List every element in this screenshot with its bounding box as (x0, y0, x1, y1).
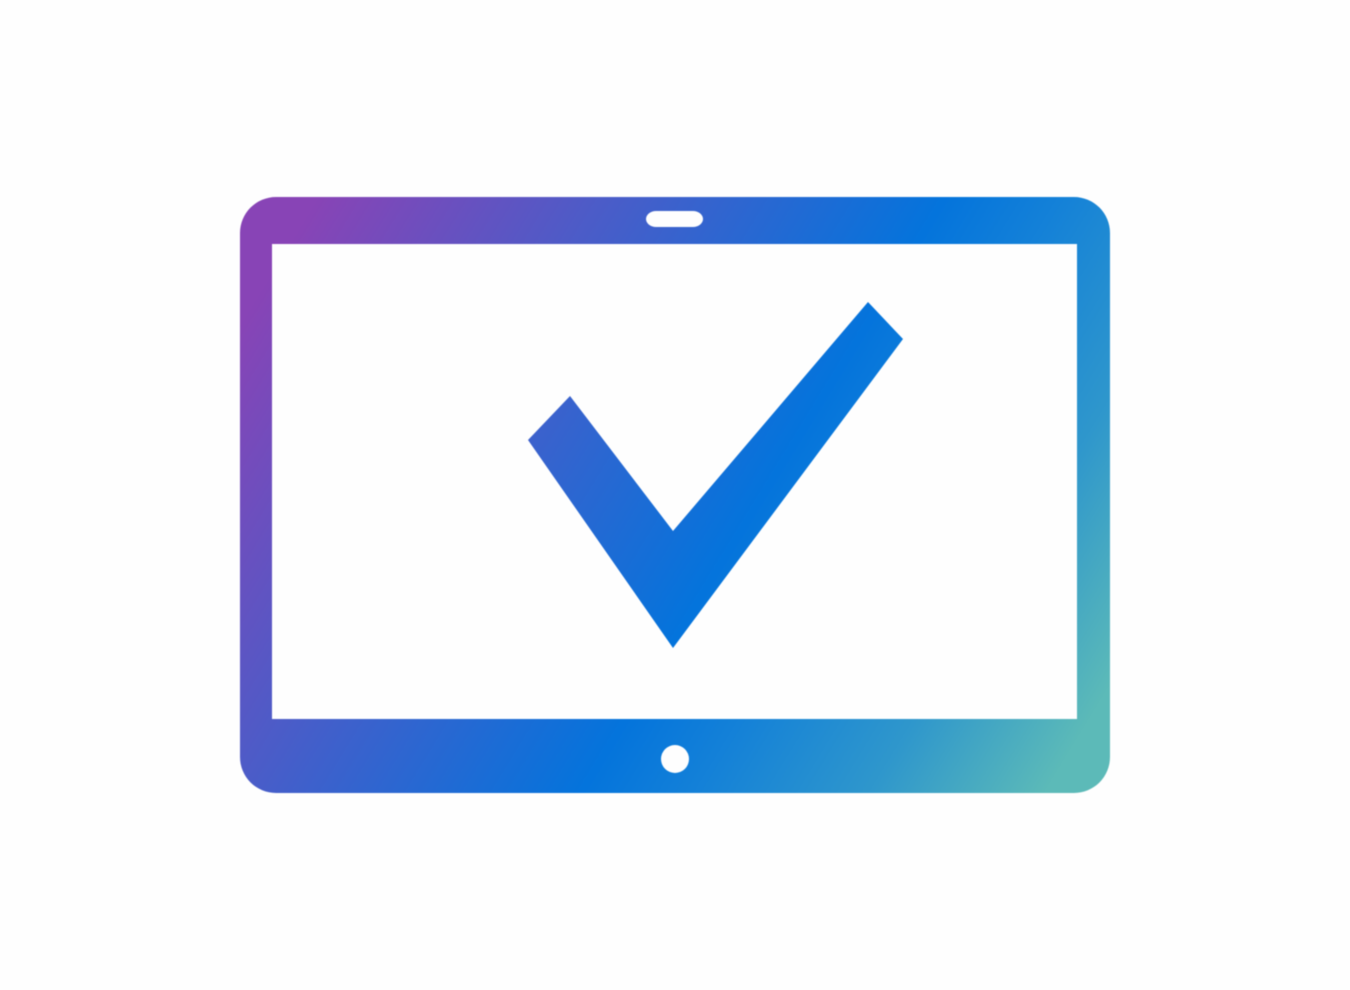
icon: tablet with check mark (240, 197, 1110, 793)
check mark (528, 302, 903, 648)
tablet camera slot (646, 211, 703, 227)
tablet home button (661, 745, 689, 773)
tablet body (240, 197, 1110, 793)
